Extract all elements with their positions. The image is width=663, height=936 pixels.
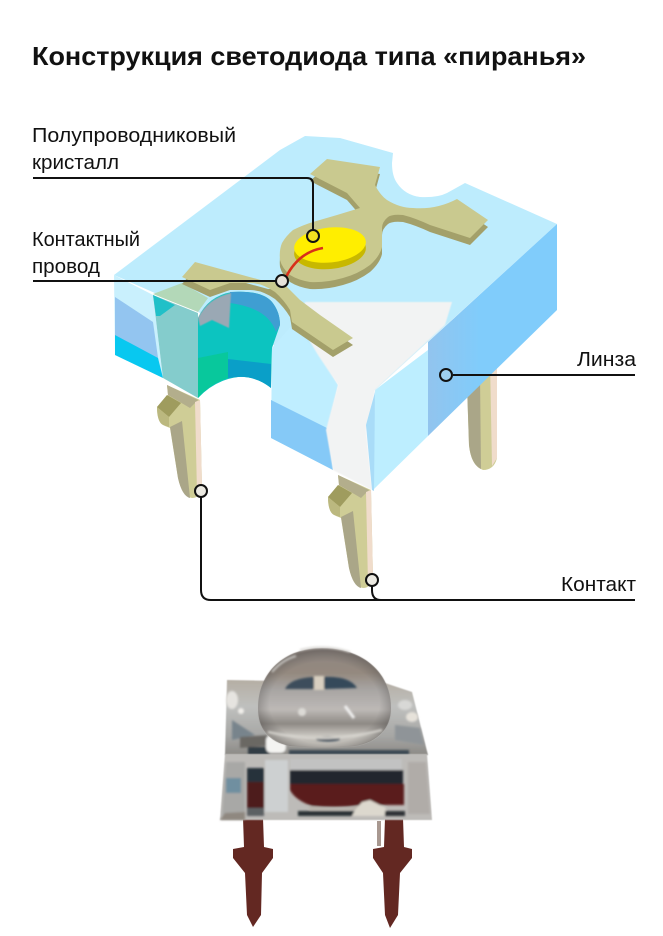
lower lead side — [182, 269, 353, 357]
teal column — [153, 295, 198, 398]
front face blue lower — [271, 400, 333, 470]
top plate — [225, 680, 428, 755]
title: Конструкция светодиода типа «пиранья» — [32, 41, 586, 71]
dome lens — [258, 648, 391, 748]
front left leg — [157, 385, 202, 498]
lead frame top X shape — [280, 159, 488, 282]
plate details — [226, 691, 424, 756]
right face light strip — [373, 350, 428, 490]
callout: lens — [440, 349, 637, 381]
left face blue patch — [115, 297, 160, 372]
semiconductor crystal — [292, 224, 368, 273]
top face — [114, 136, 557, 390]
right face — [428, 224, 557, 436]
label: wire: Контактный — [32, 229, 140, 251]
callout: crystal — [32, 125, 319, 242]
lead frame — [182, 159, 488, 357]
dome edge shading — [258, 648, 391, 748]
right pin — [373, 818, 412, 928]
arch interior — [198, 292, 280, 398]
label: lens: Линза — [577, 349, 637, 371]
white reflection — [300, 302, 452, 490]
callout: wire: провод — [32, 256, 100, 278]
photo: real piranha LED — [220, 647, 432, 928]
front face — [271, 325, 338, 470]
label: contact: Контакт — [561, 574, 636, 596]
callout: contact — [195, 485, 636, 600]
front body — [220, 754, 432, 820]
callout: crystal: кристалл — [32, 152, 119, 174]
diagram: piranha LED structure — [114, 136, 557, 588]
left face cyan patch — [115, 335, 163, 378]
label: crystal: Полупроводниковый — [32, 125, 236, 147]
callout: wire — [32, 229, 288, 287]
lens block — [114, 136, 557, 491]
dome highlights — [268, 647, 382, 742]
left pin — [233, 818, 273, 927]
lower lead top — [182, 262, 353, 350]
left face — [114, 275, 163, 378]
front details — [220, 759, 430, 820]
back right leg — [467, 355, 497, 470]
front middle leg — [328, 475, 373, 588]
lead frame side — [280, 166, 488, 289]
contact wire — [285, 248, 323, 279]
